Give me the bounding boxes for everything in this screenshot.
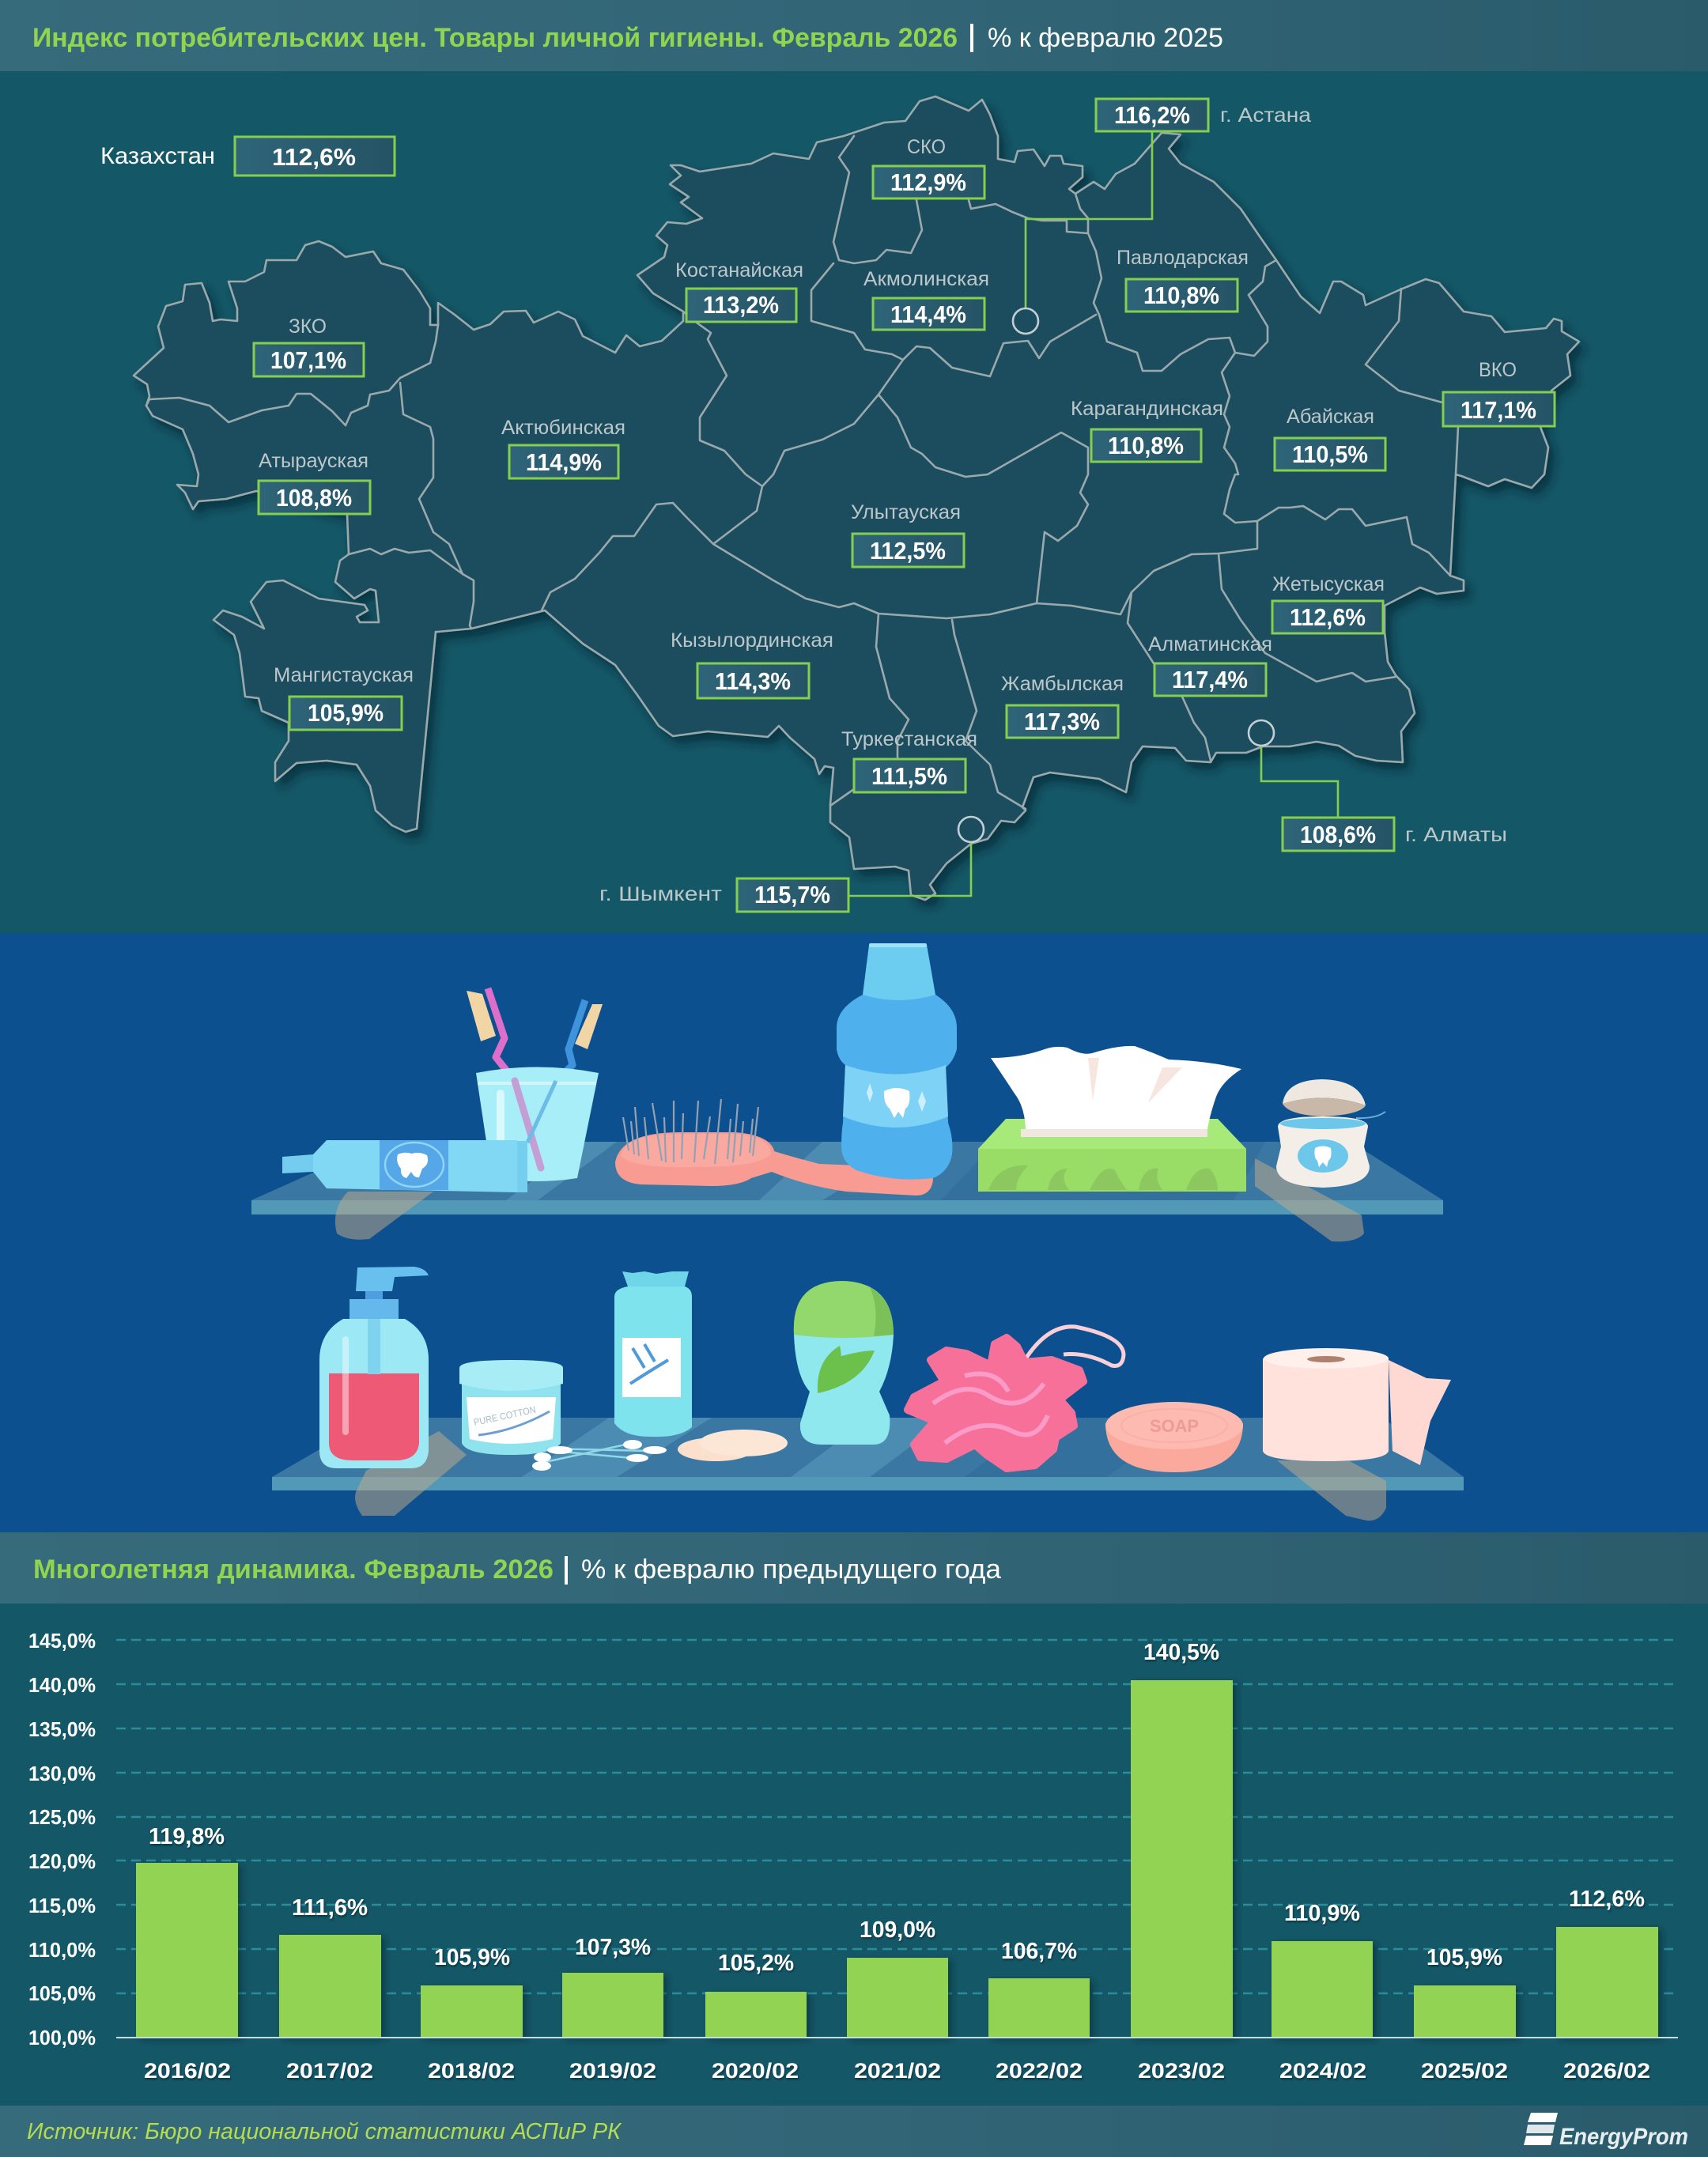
x axis labels: 2025/02: [1421, 2059, 1508, 2083]
region: Атырауская: Атырауская: [259, 450, 368, 472]
region: Костанайская: Костанайская: [675, 259, 803, 281]
header: chart section: [0, 1532, 1708, 1604]
toothbrush: pink: [467, 988, 515, 1081]
value labels: 105,9%: [434, 1945, 510, 1970]
connector: Almaty: [1249, 720, 1338, 818]
region: Мангистауская: 105,9%: [308, 699, 384, 727]
bar chart: multi-year dynamics: [28, 1629, 1678, 2083]
city: г. Алматы: 108,6%: [1300, 821, 1376, 848]
header: chart section: % к февралю предыдущего года: [581, 1554, 1001, 1585]
x axis labels: 2019/02: [569, 2059, 656, 2083]
region: Жетысуская: 112,6%: [1290, 603, 1366, 631]
national value: Kazakhstan: 112,6%: [272, 143, 356, 171]
logo: EnergyProm: EnergyProm: [1559, 2124, 1688, 2150]
region: Павлодарская: [1117, 247, 1249, 312]
cotton jar: PURE COTTON: [473, 1404, 537, 1428]
region: Жамбылская: Жамбылская: [1001, 673, 1124, 695]
region: Алматинская: 117,4%: [1172, 666, 1248, 693]
region: Акмолинская: 114,4%: [890, 300, 966, 328]
city: г. Алматы: г. Алматы: [1405, 824, 1507, 846]
region: СКО: СКО: [907, 136, 946, 158]
internal region borders: [146, 136, 1458, 809]
connector: Astana: [1013, 131, 1152, 334]
x axis labels: 2020/02: [712, 2059, 799, 2083]
region: Абайская: Абайская: [1287, 406, 1374, 428]
region: ЗКО: [254, 315, 364, 376]
dental floss: [1276, 1079, 1385, 1188]
y axis labels and grid: 135,0%: [28, 1717, 96, 1741]
region: Мангистауская: [274, 664, 414, 730]
value labels: [149, 1640, 1645, 1976]
city: г. Шымкент: [599, 878, 848, 912]
mouthwash bottle: [837, 943, 957, 1180]
region: Туркестанская: [841, 728, 977, 792]
region: Кызылординская: Кызылординская: [671, 629, 833, 652]
region: Кызылординская: 114,3%: [715, 667, 791, 695]
soap bar: SOAP: [1150, 1416, 1199, 1436]
y axis labels and grid: 120,0%: [28, 1849, 96, 1873]
cotton swabs: [532, 1440, 667, 1471]
national value: Kazakhstan: [100, 137, 395, 176]
x axis labels: 2024/02: [1279, 2059, 1366, 2083]
region: Улытауская: Улытауская: [851, 501, 961, 523]
x axis labels: 2026/02: [1563, 2059, 1650, 2083]
y axis labels and grid: 110,0%: [28, 1938, 96, 1962]
region: СКО: [873, 136, 984, 198]
hairbrush: [615, 1099, 933, 1196]
x axis labels: 2017/02: [286, 2059, 373, 2083]
city: г. Шымкент: г. Шымкент: [599, 883, 723, 905]
region: ЗКО: ЗКО: [289, 315, 327, 338]
glass: [476, 1067, 599, 1181]
region: Абайская: [1275, 406, 1385, 470]
region: Улытауская: 112,5%: [870, 537, 946, 565]
value labels: 106,7%: [1001, 1939, 1077, 1964]
region: Акмолинская: [863, 268, 989, 330]
region: Жамбылская: 117,3%: [1024, 708, 1100, 735]
region: Костанайская: 113,2%: [703, 291, 779, 319]
city: г. Астана: [1096, 99, 1311, 131]
region: Атырауская: 108,8%: [276, 484, 352, 512]
region: Акмолинская: Акмолинская: [863, 268, 989, 290]
soap pump bottle: [319, 1267, 429, 1468]
footer: [0, 2106, 1708, 2157]
y axis labels and grid: 125,0%: [28, 1805, 96, 1829]
bracket right: [1277, 1460, 1386, 1520]
region: ВКО: 117,1%: [1460, 396, 1536, 424]
city: г. Астана: 116,2%: [1114, 101, 1190, 129]
city: г. Алматы: [1283, 818, 1507, 851]
region: ВКО: [1443, 359, 1555, 426]
region: Костанайская: [675, 259, 803, 322]
map of Kazakhstan: [134, 96, 1579, 900]
tissue box: [978, 1046, 1246, 1192]
region: СКО: 112,9%: [890, 168, 966, 196]
x axis labels: [144, 2059, 1650, 2083]
region: Актюбинская: [501, 417, 625, 478]
roll-on deodorant: [794, 1281, 894, 1445]
region: Атырауская: [259, 450, 370, 514]
value labels: 119,8%: [149, 1824, 225, 1849]
value labels: 109,0%: [860, 1917, 935, 1943]
value labels: 140,5%: [1143, 1640, 1219, 1665]
y axis labels and grid: 105,0%: [28, 1981, 96, 2005]
region: Мангистауская: Мангистауская: [274, 664, 414, 686]
x axis labels: 2016/02: [144, 2059, 231, 2083]
region: Кызылординская: [671, 629, 833, 698]
toothbrush: blue: [556, 1000, 603, 1081]
value labels: 107,3%: [575, 1935, 651, 1960]
cotton pad pack: [614, 1271, 692, 1437]
region: Жетысуская: Жетысуская: [1272, 573, 1385, 595]
x axis labels: 2021/02: [854, 2059, 941, 2083]
y axis labels and grid: [28, 1629, 1678, 2049]
header: map section: Индекс потребительских цен. Товары личной гигиены. Февраль 2026: [32, 23, 958, 53]
value labels: 110,9%: [1284, 1901, 1360, 1926]
region: Актюбинская: 114,9%: [526, 448, 602, 476]
region: Туркестанская: 111,5%: [871, 762, 947, 790]
region: Карагандинская: Карагандинская: [1071, 398, 1223, 420]
region: Алматинская: [1148, 633, 1272, 696]
cotton jar: [459, 1360, 563, 1455]
y axis labels and grid: 130,0%: [28, 1762, 96, 1785]
header: map section: [0, 0, 1708, 71]
x axis labels: 2022/02: [996, 2059, 1083, 2083]
header: chart section: Многолетняя динамика. Февраль 2026: [33, 1554, 554, 1585]
region: Жетысуская: [1272, 573, 1385, 633]
lower shelf: [272, 1418, 1464, 1520]
cotton pads: [678, 1430, 788, 1461]
region: Абайская: 110,5%: [1292, 440, 1368, 468]
y axis labels and grid: 145,0%: [28, 1629, 96, 1653]
region: Карагандинская: [1071, 398, 1223, 462]
region: Павлодарская: Павлодарская: [1117, 247, 1249, 269]
upper shelf: [251, 1142, 1443, 1241]
illustration panel: hygiene products on shelves: [0, 933, 1708, 1532]
toothpaste tube: [282, 1140, 527, 1192]
bracket right: [1255, 1158, 1364, 1241]
region: Карагандинская: 110,8%: [1108, 432, 1184, 459]
loofah sponge: [908, 1327, 1124, 1468]
source note: Источник: Бюро национальной статистики АСПиР РК: [27, 2119, 622, 2144]
bracket left: [335, 1192, 433, 1240]
y axis labels and grid: 115,0%: [28, 1894, 96, 1917]
connector: Shymkent: [848, 817, 984, 896]
region: Улытауская: [851, 501, 964, 567]
national value: Kazakhstan: Казахстан: [100, 143, 215, 169]
x axis labels: 2018/02: [428, 2059, 515, 2083]
header: map section: % к февралю 2025: [988, 23, 1223, 53]
value labels: 105,9%: [1426, 1945, 1502, 1970]
region: ВКО: ВКО: [1479, 359, 1517, 381]
map silhouette with outer border: [134, 96, 1579, 900]
soap bar: [1105, 1402, 1243, 1472]
bracket left: [355, 1431, 467, 1516]
value labels: 112,6%: [1569, 1887, 1645, 1912]
toilet paper roll: [1263, 1348, 1451, 1465]
region: Алматинская: Алматинская: [1148, 633, 1272, 655]
x axis labels: 2023/02: [1138, 2059, 1225, 2083]
region: Павлодарская: 110,8%: [1143, 281, 1219, 309]
y axis labels and grid: 100,0%: [28, 2026, 96, 2049]
bristle pins: [623, 1099, 758, 1164]
city: г. Шымкент: 115,7%: [754, 881, 830, 909]
city: г. Астана: г. Астана: [1220, 104, 1311, 127]
bars: [136, 1680, 1658, 2038]
region: ЗКО: 107,1%: [270, 346, 346, 374]
region: Жамбылская: [1001, 673, 1124, 738]
region: Туркестанская: Туркестанская: [841, 728, 977, 750]
value labels: 105,2%: [718, 1951, 794, 1976]
value labels: 111,6%: [292, 1895, 368, 1921]
y axis labels and grid: 140,0%: [28, 1673, 96, 1697]
region: Актюбинская: Актюбинская: [501, 417, 625, 439]
logo: EnergyProm: [1524, 2113, 1688, 2150]
